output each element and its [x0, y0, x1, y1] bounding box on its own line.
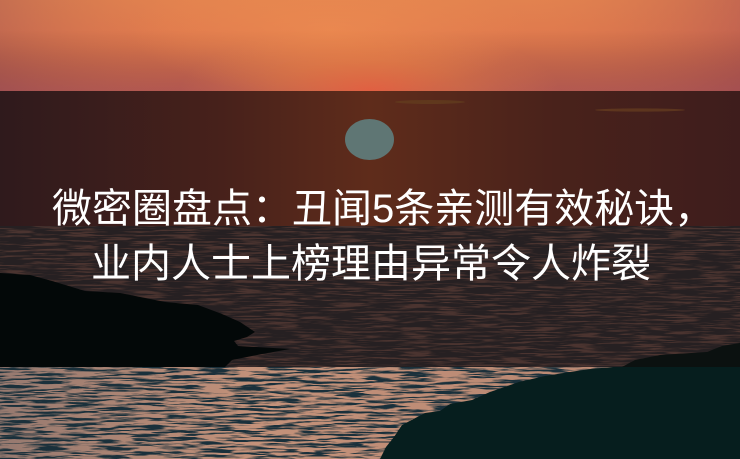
left island: [0, 273, 290, 367]
darkened upper sky: [0, 91, 740, 226]
bright sea: [0, 367, 740, 459]
title: 业内人士上榜理由异常令人炸裂: [91, 242, 651, 286]
right island: [380, 367, 740, 459]
title: 微密圈盘点：丑闻5条亲测有效秘诀，: [52, 187, 714, 231]
sun: [345, 119, 394, 160]
sunset sky: [0, 0, 740, 91]
far right headland: [622, 343, 740, 367]
title: [52, 187, 714, 286]
dark sea: [0, 226, 740, 367]
